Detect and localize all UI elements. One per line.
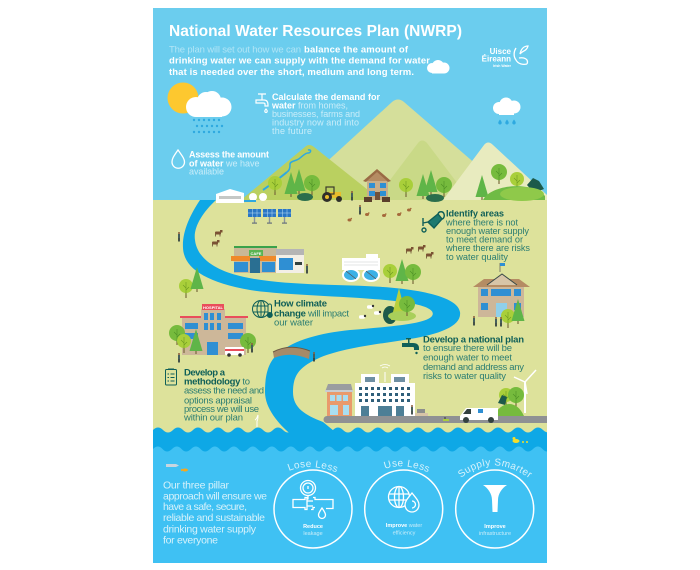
intro text: drinking water we can supply with the demand for water [169,56,430,66]
pillar intro text: drinking water supply [163,524,257,536]
pillar: lose less: Lose Less [288,460,338,472]
road [324,416,547,423]
wind turbine [514,370,536,413]
text: identify areas [445,209,530,262]
pillar intro text [163,479,267,546]
hospital [169,304,256,362]
title: National Water Resources Plan (NWRP) [169,23,462,40]
text: calculate the demand [271,92,380,136]
logo: Uisce [490,47,512,56]
text: national plan: risks to water quality [423,371,506,382]
water upper band [153,428,547,452]
cafe and shop: CAFE [251,251,262,256]
icon: clipboard [166,369,176,385]
text: climate change [274,299,349,328]
trees near plant [383,259,421,284]
pillar intro text: approach will ensure we [163,490,267,502]
pillar: use less: efficiency [393,530,416,536]
cafe and shop [231,246,308,274]
text: calculate the demand: Calculate the demand for [272,92,380,102]
text: methodology: within our plan [183,413,243,424]
sun and cloud with rain [168,82,232,133]
pillar intro text: reliable and sustainable [163,512,265,524]
text: identify areas: to meet demand or [446,234,523,244]
farm plant [216,189,267,203]
trees left on river bend [179,267,204,298]
green hill with trees [476,164,545,201]
intro text: balance the amount of [304,44,409,56]
school [473,263,530,328]
land [153,200,547,435]
text: identify areas: where there is not [445,217,518,227]
text: methodology: options appraisal [184,395,252,406]
icon: watering can [422,212,444,232]
text: methodology: assess the need and [184,386,264,396]
water lower band [153,446,552,563]
text: assess: available [189,166,224,176]
water treatment plant [342,254,380,282]
pillar: supply smarter [454,458,534,549]
text: assess: of water we have [189,158,260,168]
van [460,408,498,423]
text: assess: Assess the amount [189,150,269,160]
icon: tap [256,94,268,112]
text: methodology [183,368,264,424]
text: calculate the demand: industry now and into [272,118,359,128]
text: climate change: change will impact [274,309,349,320]
logo: Irish Water [493,64,512,68]
text: calculate the demand: the future [272,126,312,136]
logo: Éireann [482,54,511,64]
pillar: use less: Use Less [384,460,430,472]
icon: water drop [172,150,184,168]
pillar: supply smarter: Supply Smarter [458,458,532,478]
text: calculate the demand: water from homes, [271,100,348,110]
text: assess [189,150,269,176]
intro text: that is needed over the short, medium and long term. [169,67,414,78]
cyclist on road [443,417,449,421]
office building [355,364,428,416]
text: climate change: our water [274,317,313,328]
pillar intro text: for everyone [163,534,218,546]
pillar: lose less: Reduce [303,524,323,530]
text: national plan [423,334,524,382]
tractor [322,187,342,202]
logo [482,46,528,68]
bridge [273,347,315,362]
bird [255,415,258,427]
pillar: use less: Improve water [386,523,422,529]
text: national plan: Develop a national plan [423,334,524,345]
text: methodology: methodology to [184,376,250,388]
intro text [169,44,430,78]
person [351,191,353,200]
pillar: supply smarter: infrastructure [479,531,511,537]
cloud right with rain [493,98,520,124]
text: national plan: to ensure there will be [423,343,512,354]
icon: globe and drop [388,486,419,512]
intro text: The plan will set out how we can [169,44,301,56]
text: methodology: process we will use [184,404,259,415]
trees inside river bend [383,288,416,324]
pillar: use less [364,460,444,549]
solar panels [248,209,291,224]
cloud small top [427,60,450,74]
mountains [241,100,547,200]
icon: globe and thermometer [252,300,272,318]
pillar intro text: Our three pillar [163,479,230,491]
pillar: supply smarter: Improve [484,524,506,530]
pillar: lose less: leakage [303,531,323,537]
trees right of house [399,170,452,202]
green hill and trees by road [494,387,524,416]
icon: funnel [483,485,507,512]
fish [166,464,188,472]
text: climate change: How climate [274,299,327,310]
river [183,200,460,440]
pillar intro text: have a safe, secure, [163,501,247,513]
hospital: HOSPITAL [203,305,224,310]
ducks [512,437,528,443]
text: national plan: demand and address any [423,362,524,373]
trees left of tractor [268,169,320,201]
text: national plan: enough water to meet [423,353,512,364]
farm animals [178,205,434,319]
text: identify areas: Identify areas [446,209,504,219]
background sky [153,8,547,208]
text: calculate the demand: businesses, farms and [272,109,360,119]
icon: leaking pipe [293,480,333,519]
pillar: lose less [273,460,353,549]
brick building [325,384,353,416]
text: methodology: Develop a [184,368,226,379]
text: identify areas: to water quality [446,252,508,262]
icon: tap dark [402,338,419,354]
text: identify areas: where there are risks [445,243,530,253]
farmhouse [363,169,391,202]
text: identify areas: enough water supply [446,226,529,236]
